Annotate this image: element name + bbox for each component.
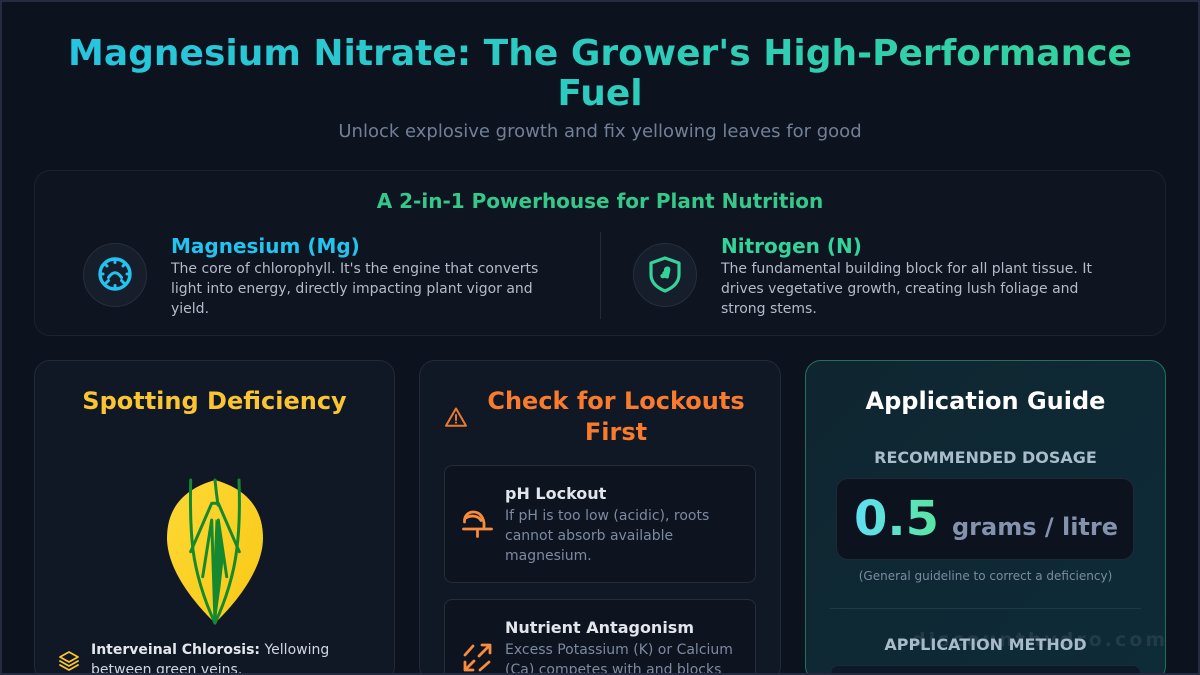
pH heading: pH Lockout xyxy=(505,484,606,503)
magnesium text xyxy=(170,234,538,317)
symptom text xyxy=(91,642,329,675)
magnesium description: yield. xyxy=(171,301,209,317)
icon: magnesium gauge xyxy=(83,243,147,307)
antagonism heading: Nutrient Antagonism xyxy=(505,618,694,637)
magnesium description xyxy=(170,261,538,317)
nitrogen description: drives vegetative growth, creating lush foliage and xyxy=(721,281,1078,297)
panel: powerhouse xyxy=(34,170,1166,336)
nitrogen description: strong stems. xyxy=(721,301,817,317)
watermark: discounthydro.com xyxy=(912,629,1168,651)
card: antagonism xyxy=(444,599,756,675)
dosage box xyxy=(836,478,1134,560)
dosage value: 0.5 xyxy=(854,491,939,547)
magnesium heading: Magnesium (Mg) xyxy=(171,234,360,258)
heading: Spotting Deficiency xyxy=(82,387,347,415)
panel: lockouts xyxy=(419,360,781,675)
pH description xyxy=(505,508,709,564)
icon: pH xyxy=(462,510,493,538)
method label: APPLICATION METHOD xyxy=(884,635,1087,654)
card: pH lockout xyxy=(444,465,756,583)
nitrogen heading: Nitrogen (N) xyxy=(721,234,862,258)
icon: arrows xyxy=(464,644,492,672)
nitrogen description xyxy=(720,261,1092,317)
antagonism description: Excess Potassium (K) or Calcium xyxy=(505,642,733,658)
title: Magnesium Nitrate: The Grower's High-Performance xyxy=(68,33,1132,74)
heading xyxy=(487,387,745,446)
title: Fuel xyxy=(557,73,643,114)
pH description: If pH is too low (acidic), roots xyxy=(505,508,709,524)
nitrogen text xyxy=(720,234,1092,317)
dosage unit: grams / litre xyxy=(952,513,1118,541)
leaf illustration xyxy=(167,478,263,625)
dosage note: (General guideline to correct a deficiency) xyxy=(859,569,1112,583)
icon: layers xyxy=(59,651,79,671)
symptom text: Interveinal Chlorosis: Yellowing xyxy=(91,642,329,658)
icon: warning xyxy=(445,408,467,427)
nitrogen description: The fundamental building block for all plant tissue. It xyxy=(721,261,1092,277)
pH description: magnesium. xyxy=(505,548,592,564)
magnesium description: light into energy, directly impacting plant vigor and xyxy=(171,281,533,297)
heading: First xyxy=(585,418,647,446)
pH description: cannot absorb available xyxy=(505,528,673,544)
panel: application guide xyxy=(805,360,1166,675)
magnesium description: The core of chlorophyll. It's the engine that converts xyxy=(171,261,538,277)
icon: nitrogen shield xyxy=(633,243,697,307)
antagonism description xyxy=(505,642,733,675)
method box xyxy=(830,665,1141,675)
title xyxy=(34,34,1166,114)
subtitle: Unlock explosive growth and fix yellowing leaves for good xyxy=(338,121,862,142)
dosage label: RECOMMENDED DOSAGE xyxy=(874,448,1097,467)
heading: Application Guide xyxy=(866,387,1105,415)
panel: spotting deficiency xyxy=(34,360,395,675)
heading: Check for Lockouts xyxy=(487,387,745,415)
panel heading: A 2-in-1 Powerhouse for Plant Nutrition xyxy=(377,189,823,213)
